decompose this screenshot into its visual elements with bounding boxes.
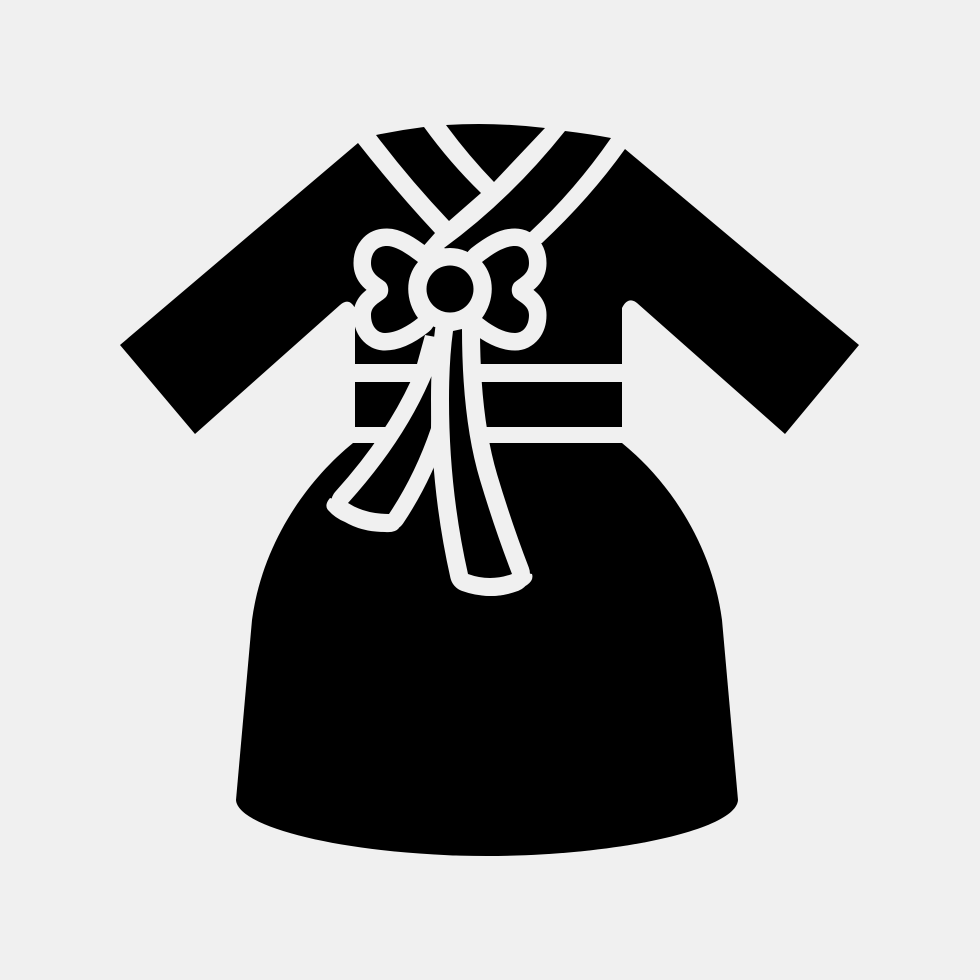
belt band [355,364,622,443]
jacket: right sleeve and bodice [470,149,859,434]
jacket: back neck [446,124,545,182]
center ribbon tail [449,329,532,596]
bow [371,246,529,333]
jacket: left sleeve and bodice [120,143,470,434]
bow: left loop [371,246,418,333]
bow: right loop [482,246,529,333]
jacket: inner collar panel [376,127,481,221]
jacket: crossing collar band [444,131,611,256]
skirt [236,443,738,856]
bow: knot center [426,266,474,312]
bow: knot ring [409,248,491,330]
left ribbon tail [326,335,452,532]
